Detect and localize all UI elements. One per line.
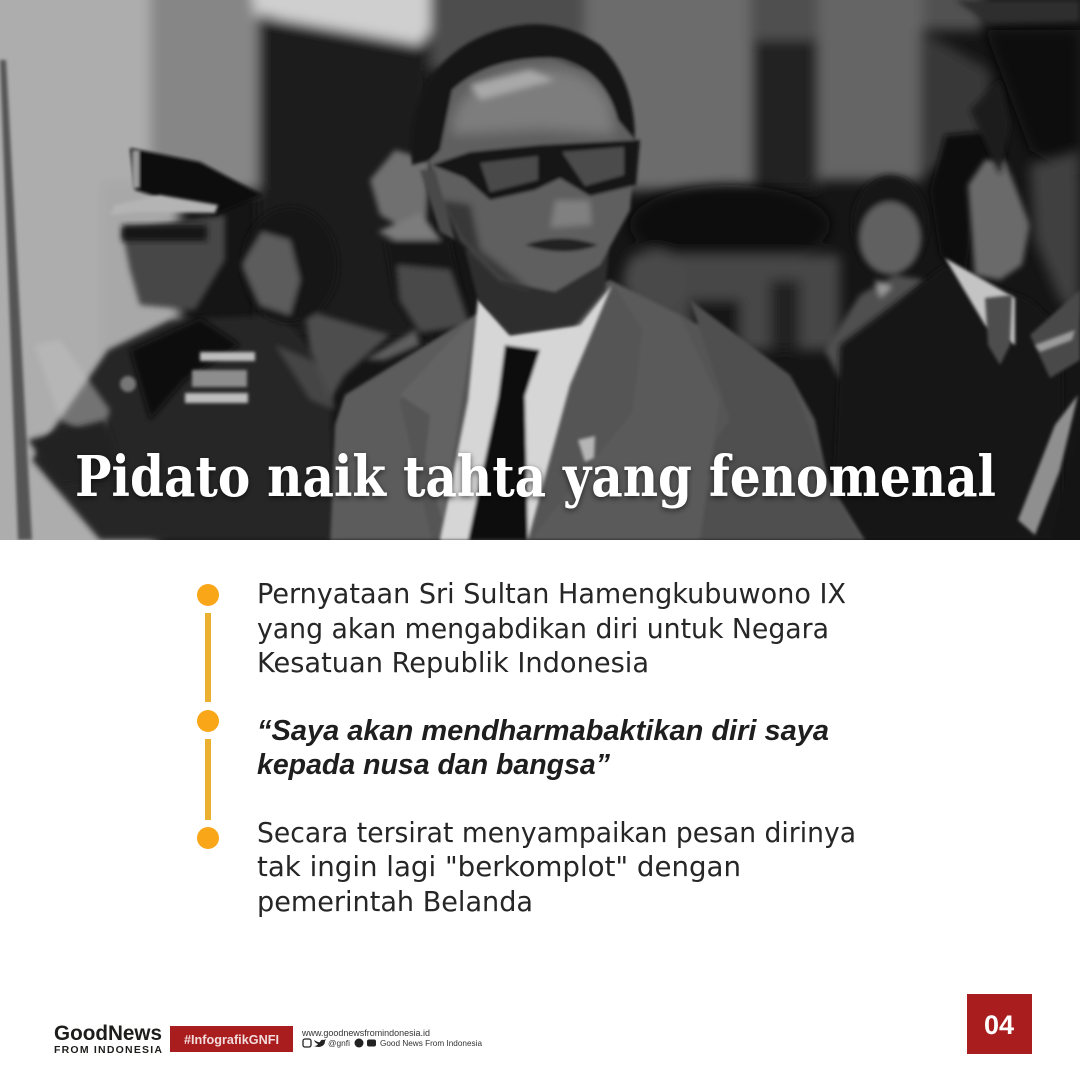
hashtag badge: #InfografikGNFI — [184, 1033, 279, 1047]
text block 3 — [257, 816, 856, 918]
central figure: neck and head — [411, 24, 640, 335]
officer body — [32, 315, 335, 540]
text block 1: yang akan mengabdikan diri untuk Negara — [257, 612, 829, 645]
text block 3: pemerintah Belanda — [257, 885, 533, 918]
social info: Good News From Indonesia — [380, 1038, 482, 1048]
social info — [301, 1028, 482, 1048]
officer behind central figure — [365, 150, 470, 360]
text block 2: quote: “Saya akan mendharmabaktikan diri saya — [257, 715, 829, 747]
icon: twitter — [314, 1039, 326, 1047]
bullet 3 — [197, 827, 219, 849]
officer at the right edge — [955, 0, 1080, 540]
text block 1 — [257, 577, 846, 679]
central figure: suit — [330, 280, 865, 540]
hair — [411, 24, 635, 165]
footer logo — [54, 1022, 162, 1056]
social info: @gnfi — [328, 1038, 350, 1048]
central figure: shirt and tie — [440, 285, 612, 540]
man on the right in dark suit — [836, 130, 1032, 381]
hashtag badge — [170, 1026, 293, 1052]
icon: instagram — [303, 1039, 311, 1047]
bullet 1 — [197, 584, 219, 606]
timeline — [197, 584, 219, 849]
text block 2: quote: kepada nusa dan bangsa” — [257, 749, 610, 781]
officer face — [122, 215, 225, 310]
text block 3: Secara tersirat menyampaikan pesan dirinya — [257, 816, 856, 849]
ear — [420, 170, 455, 240]
crowd behind on the right — [623, 185, 840, 360]
second man on the left — [242, 207, 390, 400]
man smiling at the back right — [825, 175, 928, 380]
medals — [185, 352, 255, 403]
bullet 2 — [197, 710, 219, 732]
icon: facebook — [354, 1038, 364, 1048]
text block 1: Pernyataan Sri Sultan Hamengkubuwono IX — [257, 577, 846, 610]
footer logo: FROM INDONESIA — [54, 1044, 162, 1056]
photo background: walls and columns — [0, 0, 990, 560]
social info: www.goodnewsfromindonesia.id — [301, 1028, 430, 1038]
footer logo: GoodNews — [54, 1022, 162, 1045]
officer on the left — [28, 148, 335, 540]
photo: Sri Sultan Hamengkubuwono IX among officials — [0, 0, 1080, 560]
mouth — [525, 238, 598, 252]
officer cap — [130, 148, 262, 215]
page number — [967, 994, 1032, 1054]
page number: 04 — [984, 1010, 1014, 1040]
left pole — [0, 60, 32, 540]
blurred hand — [40, 344, 112, 429]
icon: youtube — [367, 1040, 376, 1046]
text block 2: quote — [257, 715, 829, 781]
text block 1: Kesatuan Republik Indonesia — [257, 646, 649, 679]
connector 2 — [205, 739, 211, 820]
text block 3: tak ingin lagi "berkomplot" dengan — [257, 850, 741, 883]
glasses — [432, 140, 640, 200]
connector 1 — [205, 613, 211, 702]
